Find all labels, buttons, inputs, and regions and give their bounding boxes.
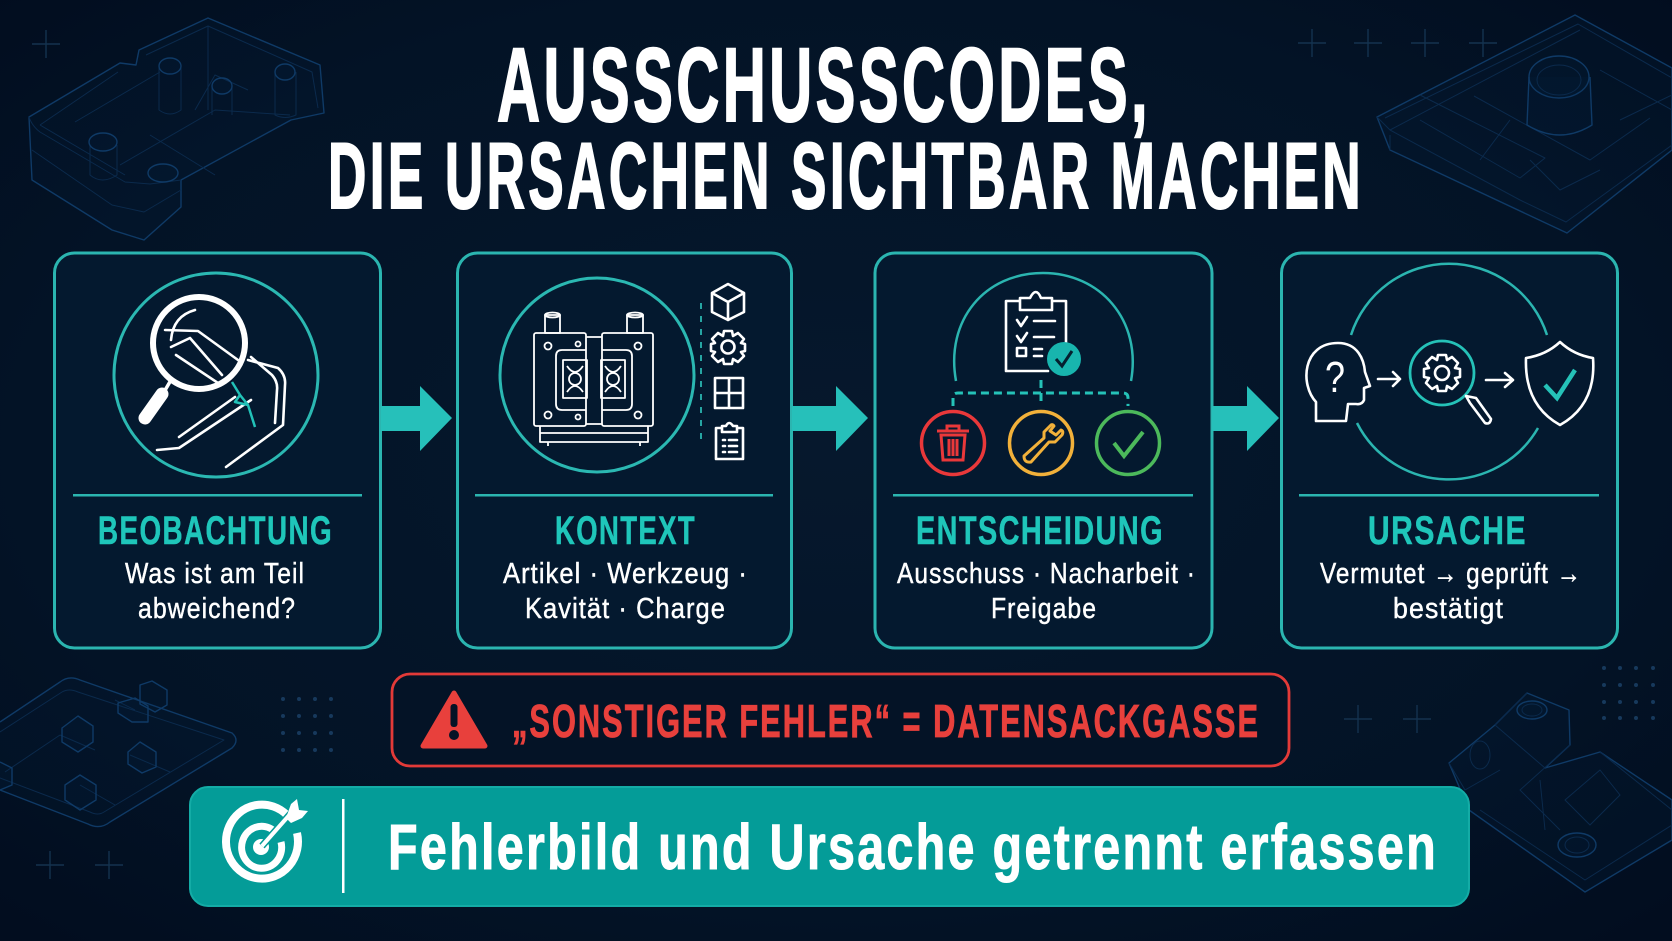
arrow	[1378, 372, 1400, 386]
divider	[73, 494, 362, 496]
description	[897, 558, 1196, 625]
takeaway banner	[190, 787, 1469, 906]
icon: gear under magnifier	[1410, 341, 1491, 424]
panel: Ursache	[1282, 253, 1618, 648]
arrow	[1486, 373, 1513, 387]
icon: head with question mark: ?	[1325, 353, 1345, 402]
icon: grid	[715, 378, 743, 408]
description	[125, 558, 305, 625]
open circle	[1351, 264, 1547, 479]
icon: cube	[712, 284, 744, 320]
divider	[893, 494, 1193, 496]
icon: head with question mark	[1306, 343, 1370, 421]
icon: scrap bin	[922, 412, 984, 474]
arrow 3	[1212, 386, 1279, 451]
description: Artikel · Werkzeug ·	[503, 558, 748, 590]
divider	[475, 494, 773, 496]
description: Was ist am Teil	[125, 558, 305, 590]
background line art: runner frame bottom left	[0, 678, 236, 827]
separator	[342, 799, 344, 893]
background line art: housing top left	[29, 18, 324, 240]
heading: KONTEXT	[555, 509, 696, 553]
icon: release check	[1096, 412, 1160, 474]
arrow 1	[381, 386, 452, 451]
panel: Entscheidung	[875, 253, 1212, 648]
icon: warning triangle	[423, 693, 485, 746]
icon: shield check	[1526, 342, 1593, 425]
description: Vermutet → geprüft →	[1320, 558, 1582, 590]
background line art: housing top right	[1377, 15, 1672, 233]
dashed decision tree	[953, 380, 1128, 406]
description: Freigabe	[991, 593, 1097, 625]
title: AUSSCHUSSCODES,	[497, 27, 1151, 144]
arrow 2	[792, 386, 868, 451]
description	[1320, 558, 1582, 625]
icon: gear	[711, 331, 745, 364]
divider	[1299, 494, 1599, 496]
panel: Beobachtung	[54, 253, 380, 648]
description	[503, 558, 748, 625]
icon: injection mold	[500, 278, 694, 472]
description: Kavität · Charge	[525, 593, 726, 625]
icon: magnifier over cracked part	[114, 273, 318, 477]
background line art: part bottom right	[1449, 693, 1672, 892]
heading: BEOBACHTUNG	[98, 509, 333, 553]
icon: checklist clipboard	[1006, 292, 1081, 376]
warning box	[392, 674, 1289, 766]
panel: Kontext	[458, 253, 792, 648]
description: bestätigt	[1393, 593, 1504, 625]
icon: target with arrow	[226, 799, 308, 879]
description: abweichend?	[138, 593, 296, 625]
description: Ausschuss · Nacharbeit ·	[897, 558, 1196, 590]
heading: URSACHE	[1368, 509, 1527, 553]
dashed separator	[700, 303, 702, 440]
title	[328, 27, 1364, 228]
icon: clipboard	[716, 423, 743, 459]
arc	[954, 273, 1133, 381]
warning text: „SONSTIGER FEHLER“ = DATENSACKGASSE	[512, 695, 1260, 747]
heading: ENTSCHEIDUNG	[916, 509, 1164, 553]
icon: rework wrench	[1010, 412, 1072, 474]
